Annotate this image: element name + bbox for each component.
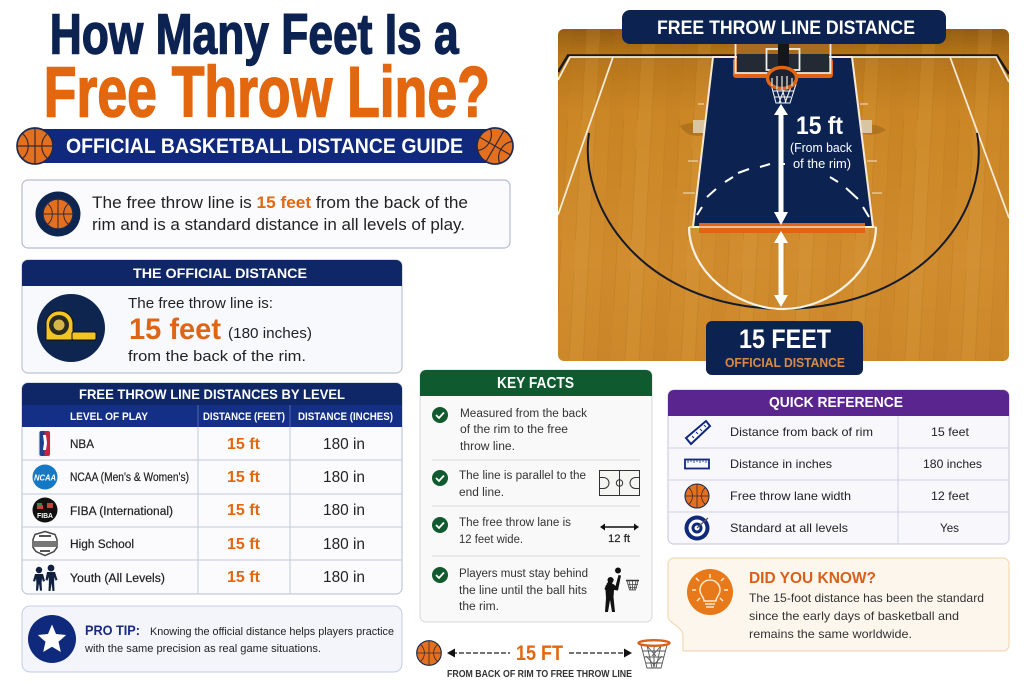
15 ft label: of the rim) — [793, 157, 851, 171]
court heading: FREE THROW LINE DISTANCE — [657, 17, 915, 39]
panel: intro statement — [22, 180, 510, 248]
did you know text: The 15-foot distance has been the standard — [749, 591, 984, 605]
did you know text: since the early days of basketball and — [749, 609, 959, 623]
panel: quick reference — [668, 390, 1009, 544]
row: High School: 15 ft — [227, 536, 260, 553]
icon: light bulb — [687, 569, 733, 615]
intro text: The free throw line is 15 feet from the back of the — [92, 193, 468, 212]
15 ft label — [790, 112, 853, 171]
table column headers: LEVEL OF PLAY — [70, 411, 149, 423]
callout: did you know — [668, 558, 1009, 651]
table column headers: DISTANCE (INCHES) — [298, 411, 393, 423]
icon: 12 ft arrow — [600, 524, 639, 545]
row: Youth: 180 in — [323, 569, 365, 586]
icon: NCAA logo: NCAA — [34, 474, 56, 482]
row: High School: 180 in — [323, 536, 365, 553]
free throw circle — [689, 227, 876, 309]
row: NCAA: NCAA (Men's & Women's) — [70, 472, 189, 484]
row: FIBA: 180 in — [323, 502, 365, 519]
row: Youth: Youth (All Levels) — [70, 573, 165, 585]
panel: the official distance — [22, 260, 402, 373]
row: FIBA: 15 ft — [227, 502, 260, 519]
fact 2: end line. — [459, 487, 504, 499]
row: FIBA: FIBA (International) — [70, 506, 173, 518]
key facts heading: KEY FACTS — [497, 375, 574, 392]
icon: tape ruler — [685, 460, 709, 468]
row: free throw lane width: 12 feet — [931, 489, 970, 503]
table column headers — [22, 405, 402, 427]
row: FIBA — [32, 498, 365, 522]
distance strip: 15 ft: FROM BACK OF RIM TO FREE THROW LINE — [447, 669, 632, 680]
row: distance in inches: 180 inches — [923, 457, 982, 471]
icon: shooter silhouette — [604, 568, 621, 612]
15 ft label: (From back — [790, 141, 853, 155]
row: distance from back of rim: 15 feet — [931, 425, 970, 439]
quick reference heading: QUICK REFERENCE — [769, 394, 903, 411]
fact 3: 12 feet wide. — [459, 534, 523, 546]
wood floor — [558, 29, 1009, 361]
row: distance from back of rim: Distance from back of rim — [730, 425, 873, 439]
arrow: left — [447, 648, 510, 658]
table title — [22, 383, 402, 405]
row: NCAA: 15 ft — [227, 469, 260, 486]
arrow: line to arc — [774, 231, 788, 307]
icon: ruler — [686, 421, 710, 444]
table column headers: DISTANCE (FEET) — [203, 411, 285, 423]
title — [44, 2, 490, 132]
three-point arc — [588, 133, 979, 309]
icon: NBA logo — [39, 431, 50, 457]
panel: the official distance: THE OFFICIAL DISTANCE — [133, 265, 307, 281]
fact 4 — [432, 567, 639, 613]
row: NCAA — [32, 464, 365, 490]
icon: basketball — [685, 484, 709, 508]
title: How Many Feet Is a — [50, 2, 460, 66]
row: free throw lane width — [685, 484, 970, 508]
distance strip: 15 ft — [417, 640, 670, 680]
icon: small hoop — [626, 580, 639, 590]
row: NBA — [39, 431, 365, 457]
panel: key facts — [420, 370, 652, 622]
fact 1: Measured from the back — [460, 408, 587, 420]
icon: star badge — [28, 615, 76, 663]
intro text: rim and is a standard distance in all levels of play. — [92, 215, 465, 234]
fact 1 — [432, 407, 587, 453]
subtitle banner: OFFICIAL BASKETBALL DISTANCE GUIDE — [66, 135, 463, 158]
subtitle banner — [17, 121, 520, 171]
pro tip text: PRO TIP: — [85, 622, 140, 638]
free throw line — [689, 223, 876, 233]
icon: ball — [417, 641, 441, 665]
court heading — [622, 10, 946, 44]
15 ft label: 15 ft — [796, 112, 844, 140]
panel: pro tip — [22, 606, 402, 672]
official distance text — [128, 296, 312, 365]
row: NBA: 180 in — [323, 436, 365, 453]
court lines — [558, 56, 1009, 74]
row: distance from back of rim — [686, 421, 970, 444]
pro tip text: with the same precision as real game situations. — [84, 643, 321, 655]
official distance text: (180 inches) — [228, 325, 312, 342]
fact 1: throw line. — [460, 441, 515, 453]
official distance text: from the back of the rim. — [128, 349, 306, 365]
row: Youth — [33, 565, 365, 591]
row: NBA: NBA — [70, 439, 94, 451]
row: standard at all levels: Standard at all levels — [730, 521, 848, 535]
table title: FREE THROW LINE DISTANCES BY LEVEL — [79, 386, 345, 402]
arrow: right — [569, 648, 632, 658]
fact 3 — [432, 517, 639, 546]
row: distance in inches — [685, 457, 982, 471]
official distance text: 15 feet — [129, 313, 221, 346]
icon: FIBA logo: FIBA — [37, 511, 54, 520]
quick reference heading — [668, 390, 1009, 416]
fact 3: The free throw lane is — [459, 517, 571, 529]
fact 1: of the rim to the free — [460, 424, 568, 436]
did you know text: remains the same worldwide. — [749, 627, 912, 641]
fact 2: The line is parallel to the — [459, 470, 586, 482]
row: Youth: 15 ft — [227, 569, 260, 586]
court callout: 15 feet: 15 FEET — [739, 324, 831, 354]
panel: distances by level table — [22, 383, 402, 594]
distance strip: 15 ft: 15 FT — [516, 642, 563, 665]
icon: basketball badge — [36, 192, 80, 236]
fact 4: the line until the ball hits — [459, 585, 587, 597]
key facts heading — [420, 370, 652, 396]
icon: 12 ft arrow: 12 ft — [608, 533, 630, 545]
row: NCAA: 180 in — [323, 469, 365, 486]
row: standard at all levels — [684, 516, 959, 540]
icon: high school shield — [33, 532, 57, 556]
fact 4: the rim. — [459, 601, 499, 613]
arrow: rim to line — [774, 104, 788, 225]
row: standard at all levels: Yes — [940, 521, 959, 535]
intro text — [92, 193, 468, 234]
hash marks and blocks — [683, 104, 882, 193]
fact 2 — [432, 470, 640, 499]
dashed arc — [697, 164, 869, 217]
did you know text — [749, 570, 984, 641]
row: NBA: 15 ft — [227, 436, 260, 453]
official distance text: The free throw line is: — [128, 296, 273, 312]
icon: FIBA logo — [32, 498, 58, 522]
row: High School — [33, 532, 365, 556]
pro tip text — [84, 622, 394, 655]
row: High School: High School — [70, 539, 134, 551]
icon: target — [684, 516, 710, 540]
pro tip text: Knowing the official distance helps players practice — [150, 626, 394, 638]
row: free throw lane width: Free throw lane width — [730, 489, 851, 503]
title: Free Throw Line? — [44, 53, 490, 132]
court callout: 15 feet — [706, 321, 863, 375]
free throw lane — [693, 57, 873, 227]
row: distance in inches: Distance in inches — [730, 457, 832, 471]
icon: mini court — [600, 470, 640, 496]
icon: tape measure — [37, 294, 105, 362]
panel: court diagram — [558, 10, 1009, 375]
icon: NCAA logo — [32, 464, 58, 490]
icon: youth figures — [33, 565, 58, 591]
fact 4: Players must stay behind — [459, 568, 588, 580]
did you know text: DID YOU KNOW? — [749, 570, 876, 587]
icon: hoop — [638, 640, 670, 668]
court callout: 15 feet: OFFICIAL DISTANCE — [725, 355, 845, 370]
backboard and hoop — [733, 44, 833, 103]
